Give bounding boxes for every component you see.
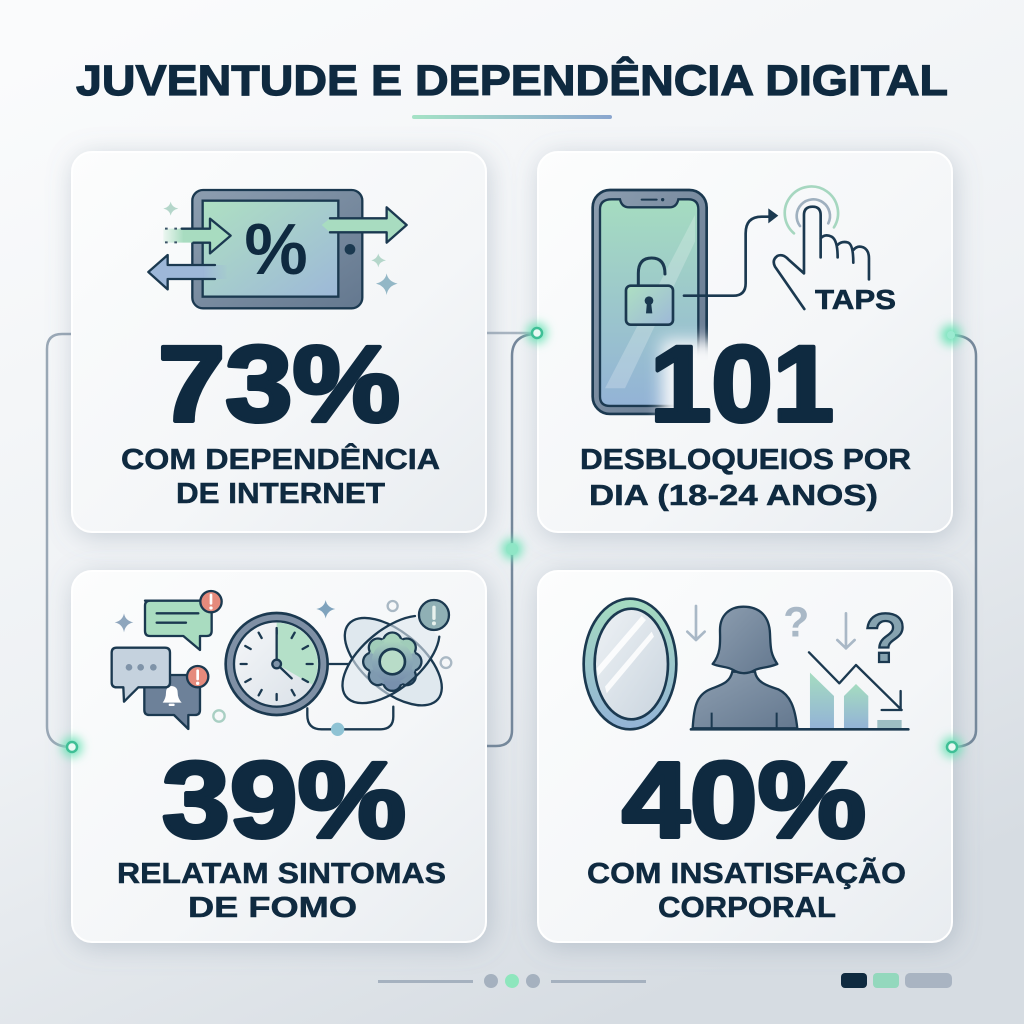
label: FOMO: RELATAM SINTOMAS bbox=[117, 858, 446, 890]
icon: tablet with percent and arrows bbox=[148, 190, 407, 308]
icon: mirror, silhouette and falling chart: ? bbox=[783, 599, 809, 647]
stat: 101: 101 bbox=[650, 323, 834, 444]
title underline bbox=[412, 115, 612, 119]
stat: 73%: 73% bbox=[158, 323, 400, 444]
label: internet dependence: DE INTERNET bbox=[176, 478, 386, 510]
label: internet dependence: COM DEPENDÊNCIA bbox=[121, 444, 440, 476]
icon: open padlock, arrow and tapping hand bbox=[626, 186, 869, 325]
panel: FOMO bbox=[72, 571, 486, 942]
icon: mirror, silhouette and falling chart bbox=[584, 599, 908, 729]
label: body dissatisfaction: COM INSATISFAÇÃO bbox=[587, 858, 906, 890]
icon: phone with padlock bbox=[593, 190, 707, 414]
footer colour legend bbox=[841, 973, 952, 988]
label: body dissatisfaction: CORPORAL bbox=[658, 892, 836, 924]
label: FOMO: DE FOMO bbox=[188, 892, 357, 924]
label: daily unlocks bbox=[580, 444, 911, 512]
icon: mirror, silhouette and falling chart: ? bbox=[864, 599, 907, 677]
panel: daily unlocks bbox=[538, 152, 952, 532]
label: daily unlocks: DIA (18-24 ANOS) bbox=[589, 480, 878, 512]
icon: tablet with percent and arrows: % bbox=[244, 209, 308, 290]
label: body dissatisfaction bbox=[587, 858, 906, 924]
label: internet dependence bbox=[121, 444, 440, 510]
footer pager bbox=[378, 974, 646, 988]
panel: body dissatisfaction bbox=[538, 571, 952, 942]
connector nodes bbox=[62, 323, 962, 757]
title: JUVENTUDE E DEPENDÊNCIA DIGITAL bbox=[76, 56, 948, 105]
stat: 39%: 39% bbox=[162, 739, 406, 860]
icon: chat bubbles, clock and atom bbox=[112, 591, 457, 736]
label: daily unlocks: DESBLOQUEIOS POR bbox=[580, 444, 911, 476]
label: FOMO bbox=[117, 858, 446, 924]
connector lines bbox=[47, 333, 976, 747]
stat: 40%: 40% bbox=[622, 739, 866, 860]
text: taps: TAPS bbox=[815, 284, 896, 315]
panel: internet dependence bbox=[72, 152, 486, 532]
